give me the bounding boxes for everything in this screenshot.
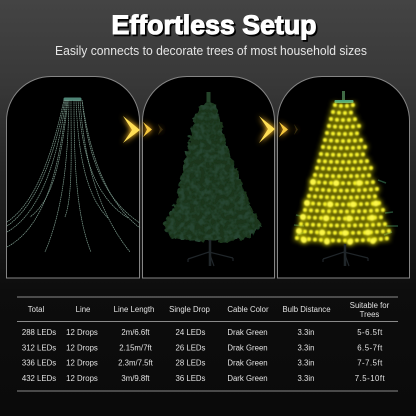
table row: 312 LEDs: 2.15m/7ft — [119, 344, 153, 352]
brighter bulbs — [299, 182, 389, 242]
table row: 336 LEDs — [22, 358, 383, 368]
table row: 312 LEDs: 12 Drops — [66, 344, 98, 352]
arrow: tree to lit tree — [259, 116, 298, 143]
table row: 432 LEDs: 36 LEDs — [176, 374, 206, 383]
arrow: strings to tree — [123, 116, 163, 143]
table row: 312 LEDs — [22, 344, 383, 352]
table row: 336 LEDs: Drak Green — [227, 358, 268, 368]
table row: 432 LEDs: 7.5-10ft — [355, 374, 386, 383]
panel: lit tree — [278, 76, 410, 278]
table header row: Line — [76, 305, 90, 314]
table row: 288 LEDs: 12 Drops — [66, 328, 98, 337]
title: Effortless Setup — [113, 12, 318, 42]
table row: 312 LEDs: 26 LEDs — [176, 344, 206, 352]
table header row: Suitable for — [350, 301, 390, 310]
table header row: Trees — [360, 310, 379, 319]
table row: 312 LEDs: 6.5-7ft — [357, 344, 383, 352]
subtitle: Easily connects to decorate trees of most household sizes — [55, 43, 367, 58]
table row: 432 LEDs: Dark Green — [227, 374, 268, 383]
icon: top ring of light strings — [64, 98, 82, 101]
title: Effortless Setup — [112, 10, 316, 40]
table row: 312 LEDs: 3.3in — [298, 344, 314, 352]
table row: 288 LEDs: 24 LEDs — [176, 328, 206, 337]
table header row: Cable Color — [227, 305, 269, 314]
tree branches behind lights — [294, 180, 398, 235]
tree foliage — [162, 102, 262, 241]
table header row: Single Drop — [169, 305, 211, 314]
panel: bare tree — [142, 76, 274, 278]
table row: 336 LEDs: 2.3m/7.5ft — [118, 358, 154, 368]
table row: 288 LEDs: 5-6.5ft — [357, 328, 383, 337]
table row: 288 LEDs — [22, 328, 383, 337]
table row: 288 LEDs: 3.3in — [298, 328, 314, 337]
table row: 312 LEDs: Drak Green — [227, 344, 268, 352]
table row: 288 LEDs: 2m/6.6ft — [121, 328, 150, 337]
table header row — [28, 301, 390, 319]
table header row: Total — [28, 305, 44, 314]
table row: 336 LEDs: 12 Drops — [66, 358, 98, 368]
table row: 336 LEDs: 3.3in — [298, 358, 314, 368]
specification table — [17, 297, 398, 391]
tree stand — [188, 240, 233, 266]
table row: 336 LEDs: 28 LEDs — [176, 358, 206, 368]
table row: 288 LEDs: Drak Green — [227, 328, 268, 337]
table header row: Bulb Distance — [282, 305, 331, 314]
tree tip and ring — [334, 91, 354, 103]
table row: 432 LEDs: 432 LEDs — [22, 374, 56, 383]
table row: 432 LEDs — [22, 374, 386, 383]
table header row: Line Length — [114, 305, 154, 314]
panel: light strings — [6, 76, 140, 278]
tree stand — [323, 244, 368, 266]
table row: 432 LEDs: 12 Drops — [66, 374, 98, 383]
table row: 336 LEDs: 7-7.5ft — [357, 358, 383, 368]
light string drops — [7, 100, 140, 252]
table row: 432 LEDs: 3.3in — [298, 374, 314, 383]
table row: 312 LEDs: 312 LEDs — [22, 344, 56, 352]
table row: 432 LEDs: 3m/9.8ft — [121, 374, 150, 383]
table row: 288 LEDs: 288 LEDs — [22, 328, 56, 337]
string light glow rows — [297, 105, 391, 240]
table row: 336 LEDs: 336 LEDs — [22, 358, 56, 368]
tree tip — [206, 92, 210, 106]
